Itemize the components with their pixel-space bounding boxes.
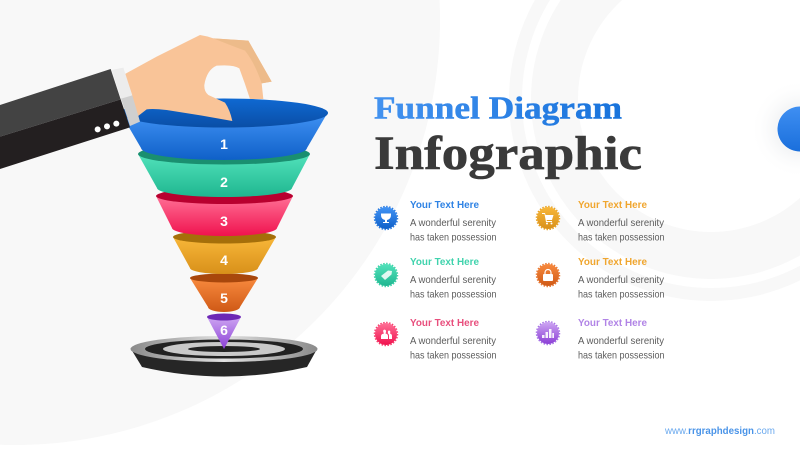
description	[410, 274, 497, 300]
blue half circle accent	[778, 106, 800, 152]
list items	[374, 199, 665, 362]
icon: lock	[536, 264, 560, 286]
arm and hand	[0, 35, 272, 169]
title line 1: Funnel Diagram	[374, 90, 622, 126]
icon: bar chart	[536, 322, 560, 344]
item 3	[374, 317, 497, 362]
sleeve	[0, 69, 130, 169]
description: has taken possession	[410, 232, 497, 244]
description: has taken possession	[410, 288, 497, 300]
item 2	[374, 256, 497, 300]
description	[578, 217, 665, 244]
funnel layer 2	[138, 144, 310, 197]
item 6	[536, 317, 665, 362]
funnel layer 6	[207, 314, 241, 349]
description	[578, 335, 665, 362]
heading: Your Text Here	[410, 199, 479, 211]
heading: Your Text Here	[578, 256, 647, 268]
description	[578, 274, 665, 300]
description: has taken possession	[578, 288, 665, 300]
description: A wonderful serenity	[578, 335, 665, 347]
description: A wonderful serenity	[410, 335, 497, 347]
funnel layer 2: 2	[220, 174, 228, 190]
funnel layer 1	[120, 98, 328, 160]
description: A wonderful serenity	[410, 217, 497, 229]
item 4	[536, 199, 665, 244]
description	[410, 335, 497, 362]
icon: trophy	[374, 206, 398, 230]
funnel	[120, 98, 328, 349]
heading: Your Text Here	[410, 256, 479, 268]
hand	[125, 35, 272, 121]
description: has taken possession	[578, 232, 665, 244]
website footer: www.rrgraphdesign.com	[664, 425, 775, 437]
description: A wonderful serenity	[578, 217, 665, 229]
description: has taken possession	[410, 350, 497, 362]
funnel layer 3: 3	[220, 213, 228, 229]
target base	[130, 336, 318, 376]
funnel layer 3	[156, 188, 293, 236]
funnel layer 6: 6	[220, 322, 228, 338]
description: A wonderful serenity	[578, 274, 665, 286]
title line 2: Infographic	[374, 127, 642, 180]
funnel layer 4: 4	[220, 252, 228, 268]
title	[374, 90, 642, 180]
icon: cart	[536, 206, 560, 230]
shirt cuff	[112, 68, 140, 126]
heading: Your Text Here	[410, 317, 479, 329]
icon: users	[374, 322, 398, 346]
funnel layer 5: 5	[220, 290, 228, 306]
description	[410, 217, 497, 244]
description: has taken possession	[578, 350, 665, 362]
heading: Your Text Here	[578, 317, 647, 329]
funnel layer 4	[173, 230, 276, 274]
item 1	[374, 199, 497, 244]
funnel layer 5	[190, 274, 258, 312]
description: A wonderful serenity	[410, 274, 497, 286]
funnel layer 1: 1	[220, 136, 228, 152]
item 5	[536, 256, 665, 300]
heading: Your Text Here	[578, 199, 647, 211]
icon: tag	[374, 264, 398, 286]
